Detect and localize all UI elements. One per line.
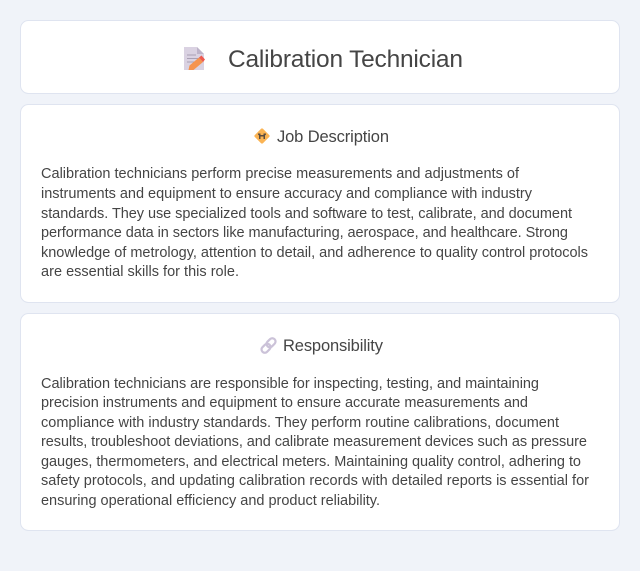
text block: responsibility: compliance with industry standards. They perform routine calibrations, document <box>41 415 559 431</box>
icon: road sign diamond <box>254 128 270 144</box>
text block: responsibility: ensuring operational efficiency and product reliability. <box>41 493 380 509</box>
text block: responsibility: safety protocols, and updating calibration records with detailed reports is essential for <box>41 473 589 489</box>
text block: responsibility: Calibration technicians are responsible for inspecting, testing, and maintaining <box>41 376 539 392</box>
panel: title card <box>20 20 620 94</box>
text block: job description: knowledge of metrology, attention to detail, and adherence to quality control protocols <box>41 245 588 261</box>
panel: job description <box>20 104 620 302</box>
text block: job description <box>41 166 588 280</box>
text block: responsibility <box>41 376 589 509</box>
heading: responsibility: Responsibility <box>283 337 384 355</box>
panel: responsibility <box>20 314 620 530</box>
text block: responsibility: gauges, thermometers, and electrical meters. Maintaining quality control, adhering to <box>41 454 581 470</box>
text block: job description: Calibration technicians perform precise measurements and adjustments of <box>41 166 520 182</box>
text block: responsibility: precision instruments and equipment to ensure accurate measurements and <box>41 395 528 411</box>
heading: job description: Job Description <box>277 128 389 146</box>
text block: responsibility: results, troubleshoot deviations, and calibrate measurement devices such as pressure <box>41 434 587 450</box>
text block: job description: instruments and equipment to ensure accuracy and compliance with industry <box>41 186 533 202</box>
text block: job description: are essential skills for this role. <box>41 264 239 280</box>
text block: job description: standards. They use specialized tools and software to test, calibrate, and document <box>41 206 572 222</box>
icon: chain link <box>260 337 277 354</box>
text block: job description: performance data in sectors like manufacturing, aerospace, and healthcare. Strong <box>41 225 568 241</box>
icon: document with pencil <box>184 47 205 70</box>
title: Calibration Technician <box>228 46 463 73</box>
